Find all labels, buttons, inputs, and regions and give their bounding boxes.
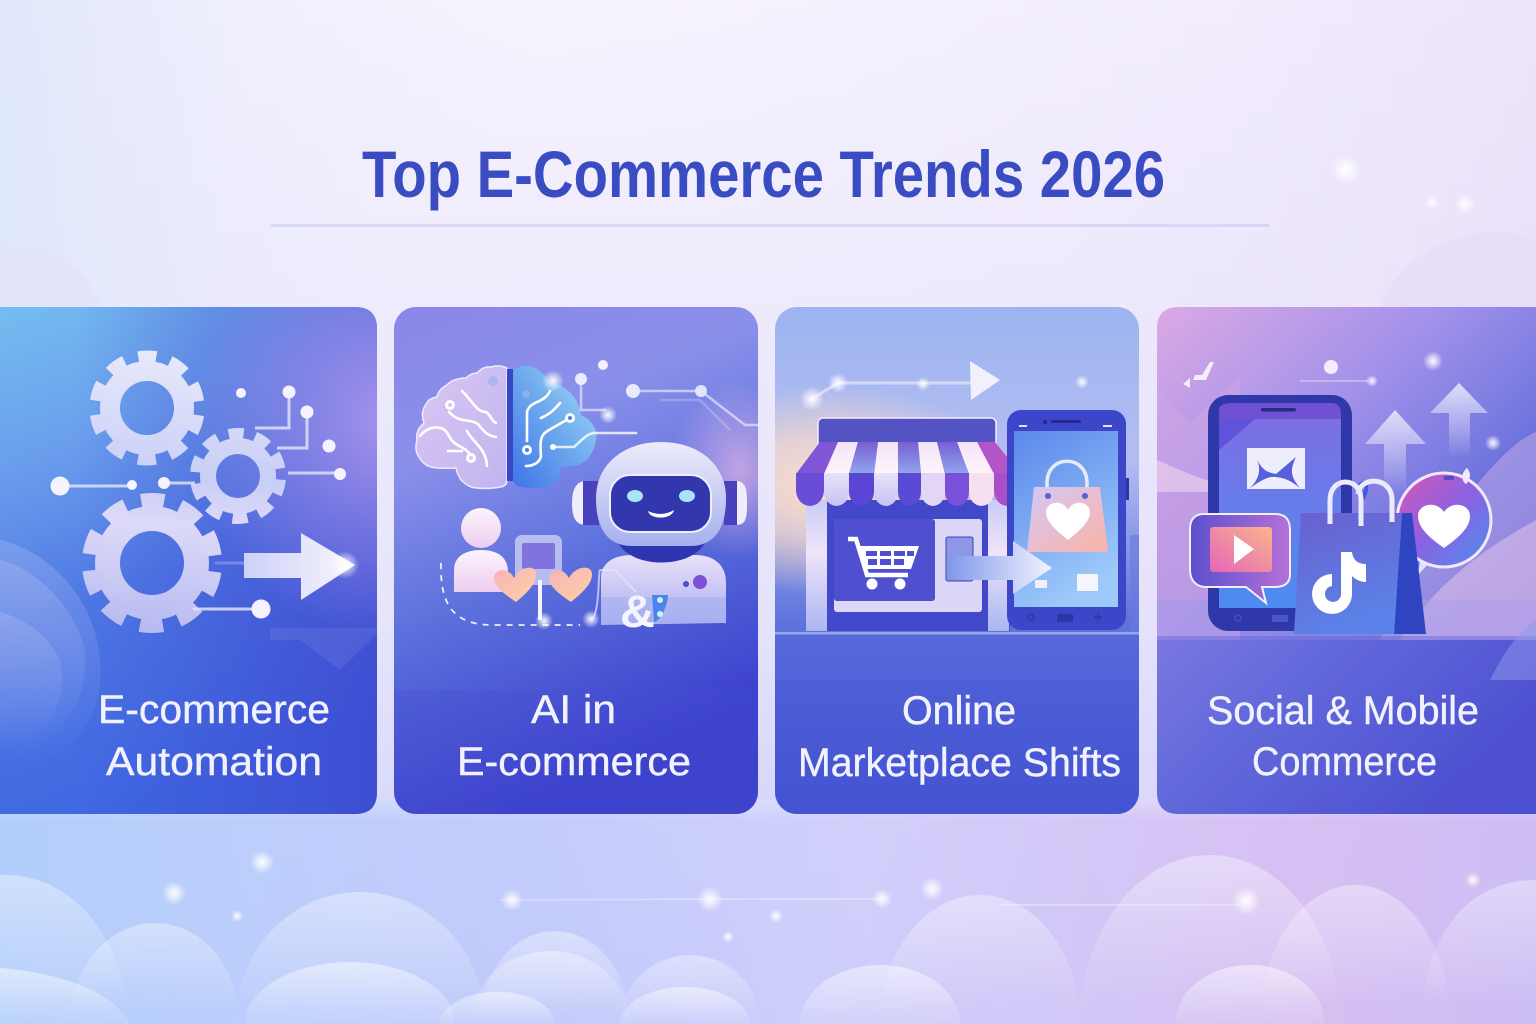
icon: shopping cart xyxy=(848,539,919,590)
glowing nodes xyxy=(50,386,346,618)
icon: gears xyxy=(84,352,282,631)
arrow with glowing trail xyxy=(800,361,1089,411)
icon: person with device xyxy=(441,508,636,630)
icon: storefront xyxy=(796,418,1021,631)
ground line xyxy=(775,632,1139,634)
icon: video bubble xyxy=(1190,514,1290,603)
glowing nodes xyxy=(542,360,707,424)
label: Social & Mobile Commerce: Social & Mobile xyxy=(1207,689,1479,733)
circuit lines xyxy=(60,392,340,609)
label: Social & Mobile Commerce: Commerce xyxy=(1252,740,1437,784)
icon: brain xyxy=(416,366,636,488)
panel: Online Marketplace Shifts xyxy=(775,307,1139,814)
title: Top E-Commerce Trends 2026 xyxy=(362,137,1165,211)
icon: smartphone with bag xyxy=(1007,410,1129,630)
circuit lines xyxy=(581,378,758,430)
label: E-commerce Automation xyxy=(98,688,330,784)
label: Online Marketplace Shifts: Online xyxy=(902,689,1016,733)
label: E-commerce Automation: Automation xyxy=(106,740,322,784)
label: AI in E-commerce xyxy=(457,688,691,784)
panel: E-commerce Automation xyxy=(0,307,377,814)
label: Online Marketplace Shifts: Marketplace Shifts xyxy=(798,741,1121,785)
music note and sparkles xyxy=(1183,351,1501,451)
title underline xyxy=(270,224,1270,227)
icon: shopping bag with music logo xyxy=(1294,481,1426,634)
label: AI in E-commerce: E-commerce xyxy=(457,740,691,784)
icon: ampersand: & xyxy=(620,586,655,637)
label: E-commerce Automation: E-commerce xyxy=(98,688,330,732)
label: Online Marketplace Shifts xyxy=(798,689,1121,785)
icon: envelope xyxy=(1247,448,1305,489)
label: Social & Mobile Commerce xyxy=(1207,689,1479,784)
icon: smartphone xyxy=(1208,395,1352,631)
panel: Social & Mobile Commerce xyxy=(1157,307,1536,814)
label: AI in E-commerce: AI in xyxy=(531,688,616,732)
panel: AI in E-commerce xyxy=(394,307,758,814)
icon: heart bubble xyxy=(1397,468,1491,575)
up arrows xyxy=(1365,383,1488,490)
icon: ampersand xyxy=(620,586,668,637)
arrow: store to phone xyxy=(948,541,1052,594)
icon: robot xyxy=(572,442,747,625)
arrow xyxy=(244,533,359,600)
